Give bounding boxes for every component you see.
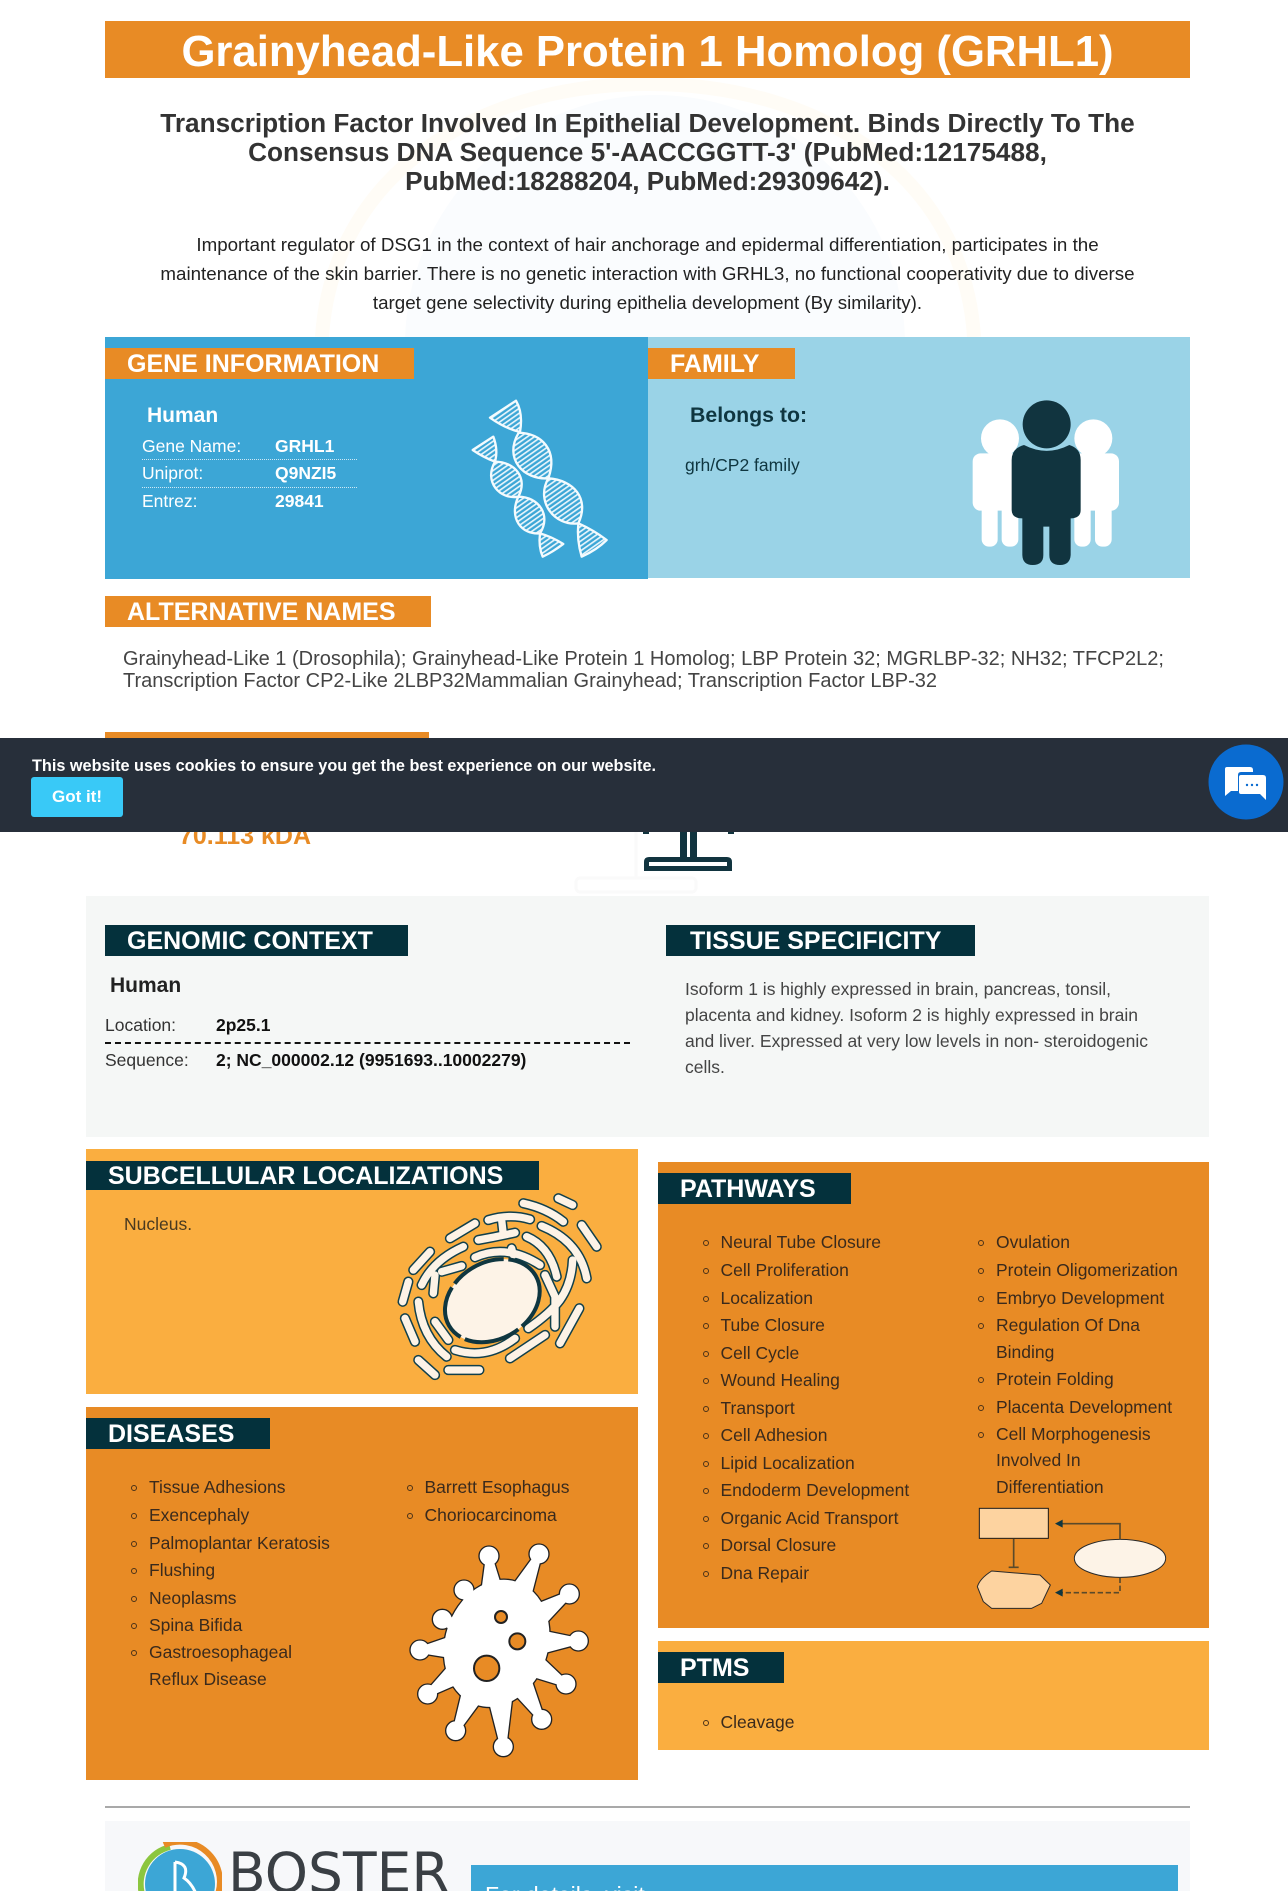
footer divider bbox=[105, 1806, 1190, 1808]
localization text: Nucleus. bbox=[124, 1214, 192, 1234]
sequence row: 2; NC_000002.12 (9951693..10002279) bbox=[216, 1050, 526, 1070]
pathway list: Cell Cycle bbox=[720, 1343, 799, 1363]
icon: virus bbox=[409, 1543, 589, 1758]
tissue specificity text: and liver. Expressed at very low levels in non- steroidogenic bbox=[685, 1031, 1148, 1051]
pathway list: Endoderm Development bbox=[720, 1480, 909, 1500]
uniprot row bbox=[142, 460, 357, 488]
disease list: Spina Bifida bbox=[149, 1615, 242, 1635]
icon: chat button bbox=[1208, 744, 1284, 820]
pathway list: Regulation Of Dna bbox=[996, 1315, 1140, 1335]
pathway list: Differentiation bbox=[996, 1477, 1104, 1497]
pathway list: Involved In bbox=[996, 1450, 1081, 1470]
pathway list: Localization bbox=[720, 1288, 813, 1308]
panel: diseases bbox=[86, 1407, 638, 1780]
gene name row bbox=[142, 432, 357, 460]
pathway list: Wound Healing bbox=[720, 1370, 840, 1390]
heading: tissue specificity: TISSUE SPECIFICITY bbox=[690, 927, 941, 955]
heading: ptms bbox=[658, 1652, 784, 1683]
pathway list: Organic Acid Transport bbox=[720, 1508, 898, 1528]
pathway list: Tube Closure bbox=[720, 1315, 825, 1335]
species label: Human bbox=[147, 404, 218, 426]
tissue specificity text: cells. bbox=[685, 1057, 725, 1077]
icon: people group bbox=[972, 400, 1119, 565]
panel: pathways bbox=[658, 1162, 1209, 1628]
pathway list bbox=[703, 1232, 1178, 1583]
faint watermark logo bbox=[315, 78, 981, 337]
heading: gene information: GENE INFORMATION bbox=[127, 350, 379, 378]
summary paragraph: target gene selectivity during epithelia development (By similarity). bbox=[373, 292, 922, 313]
uniprot row: Uniprot: bbox=[142, 463, 203, 483]
ptm list: Cleavage bbox=[720, 1712, 794, 1732]
heading: family: FAMILY bbox=[670, 350, 759, 378]
button: got it: Got it! bbox=[52, 787, 102, 806]
tissue specificity text: placenta and kidney. Isoform 2 is highly expressed in brain bbox=[685, 1005, 1138, 1025]
icon: dna helices bbox=[472, 400, 608, 558]
panel: subcellular localizations bbox=[86, 1149, 638, 1394]
alternative names text: Transcription Factor CP2-Like 2LBP32Mammalian Grainyhead; Transcription Factor LBP-32 bbox=[123, 670, 937, 692]
panel: family bbox=[648, 337, 1190, 578]
pathway list: Embryo Development bbox=[996, 1288, 1164, 1308]
heading: ptms: PTMS bbox=[680, 1654, 749, 1682]
species label: Human bbox=[110, 974, 181, 997]
cookie banner bbox=[0, 738, 1288, 832]
heading: family bbox=[648, 348, 795, 379]
icon: nucleus and endoplasmic reticulum bbox=[398, 1193, 602, 1380]
summary paragraph: maintenance of the skin barrier. There is no genetic interaction with GRHL3, no functional cooperativity due to diverse bbox=[160, 263, 1135, 284]
cookie message: This website uses cookies to ensure you get the best experience on our website. bbox=[32, 756, 656, 774]
subtitle: Consensus DNA Sequence 5'-AACCGGTT-3' (PubMed:12175488, bbox=[248, 137, 1047, 167]
heading: alternative names: ALTERNATIVE NAMES bbox=[127, 598, 396, 626]
panel: genomic context and tissue specificity bbox=[86, 896, 1209, 1137]
location row: 2p25.1 bbox=[216, 1015, 270, 1035]
pathway list: Neural Tube Closure bbox=[720, 1232, 881, 1252]
pathway list: Ovulation bbox=[996, 1232, 1070, 1252]
icon: microscope stand bbox=[643, 832, 734, 871]
button: got it bbox=[31, 777, 123, 817]
details box bbox=[471, 1865, 1178, 1891]
pathway list: Cell Proliferation bbox=[720, 1260, 849, 1280]
heading: diseases: DISEASES bbox=[108, 1420, 234, 1448]
disease list: Exencephaly bbox=[149, 1505, 249, 1525]
pathway list: Binding bbox=[996, 1342, 1054, 1362]
subtitle bbox=[160, 108, 1135, 196]
disease list: Neoplasms bbox=[149, 1588, 237, 1608]
heading: molecular mass (mostly hidden) bbox=[105, 732, 429, 763]
heading: genomic context: GENOMIC CONTEXT bbox=[127, 927, 373, 955]
pathway list: Placenta Development bbox=[996, 1397, 1172, 1417]
panel: ptms bbox=[658, 1641, 1209, 1750]
gene name row: GRHL1 bbox=[275, 436, 334, 456]
pathway list: Lipid Localization bbox=[720, 1453, 855, 1473]
molecular mass value: 70.113 kDA bbox=[179, 822, 311, 850]
location row: Location: bbox=[105, 1015, 176, 1035]
disease list: Choriocarcinoma bbox=[424, 1505, 557, 1525]
uniprot row: Q9NZI5 bbox=[275, 463, 336, 483]
belongs to label: Belongs to: bbox=[690, 403, 807, 427]
disease list: Flushing bbox=[149, 1560, 215, 1580]
disease list: Gastroesophageal bbox=[149, 1642, 292, 1662]
panel: gene information bbox=[105, 337, 648, 579]
disease list: Barrett Esophagus bbox=[424, 1477, 569, 1497]
summary paragraph: Important regulator of DSG1 in the context of hair anchorage and epidermal differentiation, participates in the bbox=[196, 234, 1099, 255]
pathway list: Dorsal Closure bbox=[720, 1535, 836, 1555]
pathway list: Protein Folding bbox=[996, 1369, 1114, 1389]
pathway list: Transport bbox=[720, 1398, 795, 1418]
logo: boster mark bbox=[138, 1842, 222, 1891]
tissue specificity text bbox=[685, 979, 1148, 1077]
subtitle: Transcription Factor Involved In Epithelial Development. Binds Directly To The bbox=[160, 108, 1135, 138]
sequence row: Sequence: bbox=[105, 1050, 189, 1070]
title: Grainyhead-Like Protein 1 Homolog (GRHL1) bbox=[181, 27, 1114, 76]
pathway list: Dna Repair bbox=[720, 1563, 809, 1583]
family name: grh/CP2 family bbox=[685, 455, 800, 475]
summary paragraph bbox=[160, 234, 1135, 313]
alternative names text: Grainyhead-Like 1 (Drosophila); Grainyhead-Like Protein 1 Homolog; LBP Protein 32; MGRLBP-32; NH32; TFCP2L2; bbox=[123, 648, 1164, 670]
heading: pathways: PATHWAYS bbox=[680, 1175, 816, 1203]
heading: subcellular localizations: SUBCELLULAR LOCALIZATIONS bbox=[108, 1162, 503, 1190]
pathway list: Protein Oligomerization bbox=[996, 1260, 1178, 1280]
tissue specificity text: Isoform 1 is highly expressed in brain, pancreas, tonsil, bbox=[685, 979, 1111, 999]
gene name row: Gene Name: bbox=[142, 436, 241, 456]
location row bbox=[105, 1012, 630, 1044]
disease list bbox=[131, 1477, 569, 1689]
pathway list: Cell Adhesion bbox=[720, 1425, 828, 1445]
entrez row: Entrez: bbox=[142, 491, 197, 511]
icon: pathway diagram bbox=[976, 1508, 1166, 1609]
pathway list: Cell Morphogenesis bbox=[996, 1424, 1151, 1444]
alternative names text bbox=[123, 648, 1164, 692]
entrez row bbox=[142, 491, 324, 511]
subtitle: PubMed:18288204, PubMed:29309642). bbox=[405, 166, 890, 196]
disease list: Tissue Adhesions bbox=[149, 1477, 286, 1497]
heading: diseases bbox=[86, 1418, 270, 1449]
heading: pathways bbox=[658, 1173, 851, 1204]
entrez row: 29841 bbox=[275, 491, 324, 511]
panel: footer bbox=[105, 1821, 1190, 1891]
disease list: Palmoplantar Keratosis bbox=[149, 1533, 330, 1553]
disease list: Reflux Disease bbox=[149, 1669, 267, 1689]
